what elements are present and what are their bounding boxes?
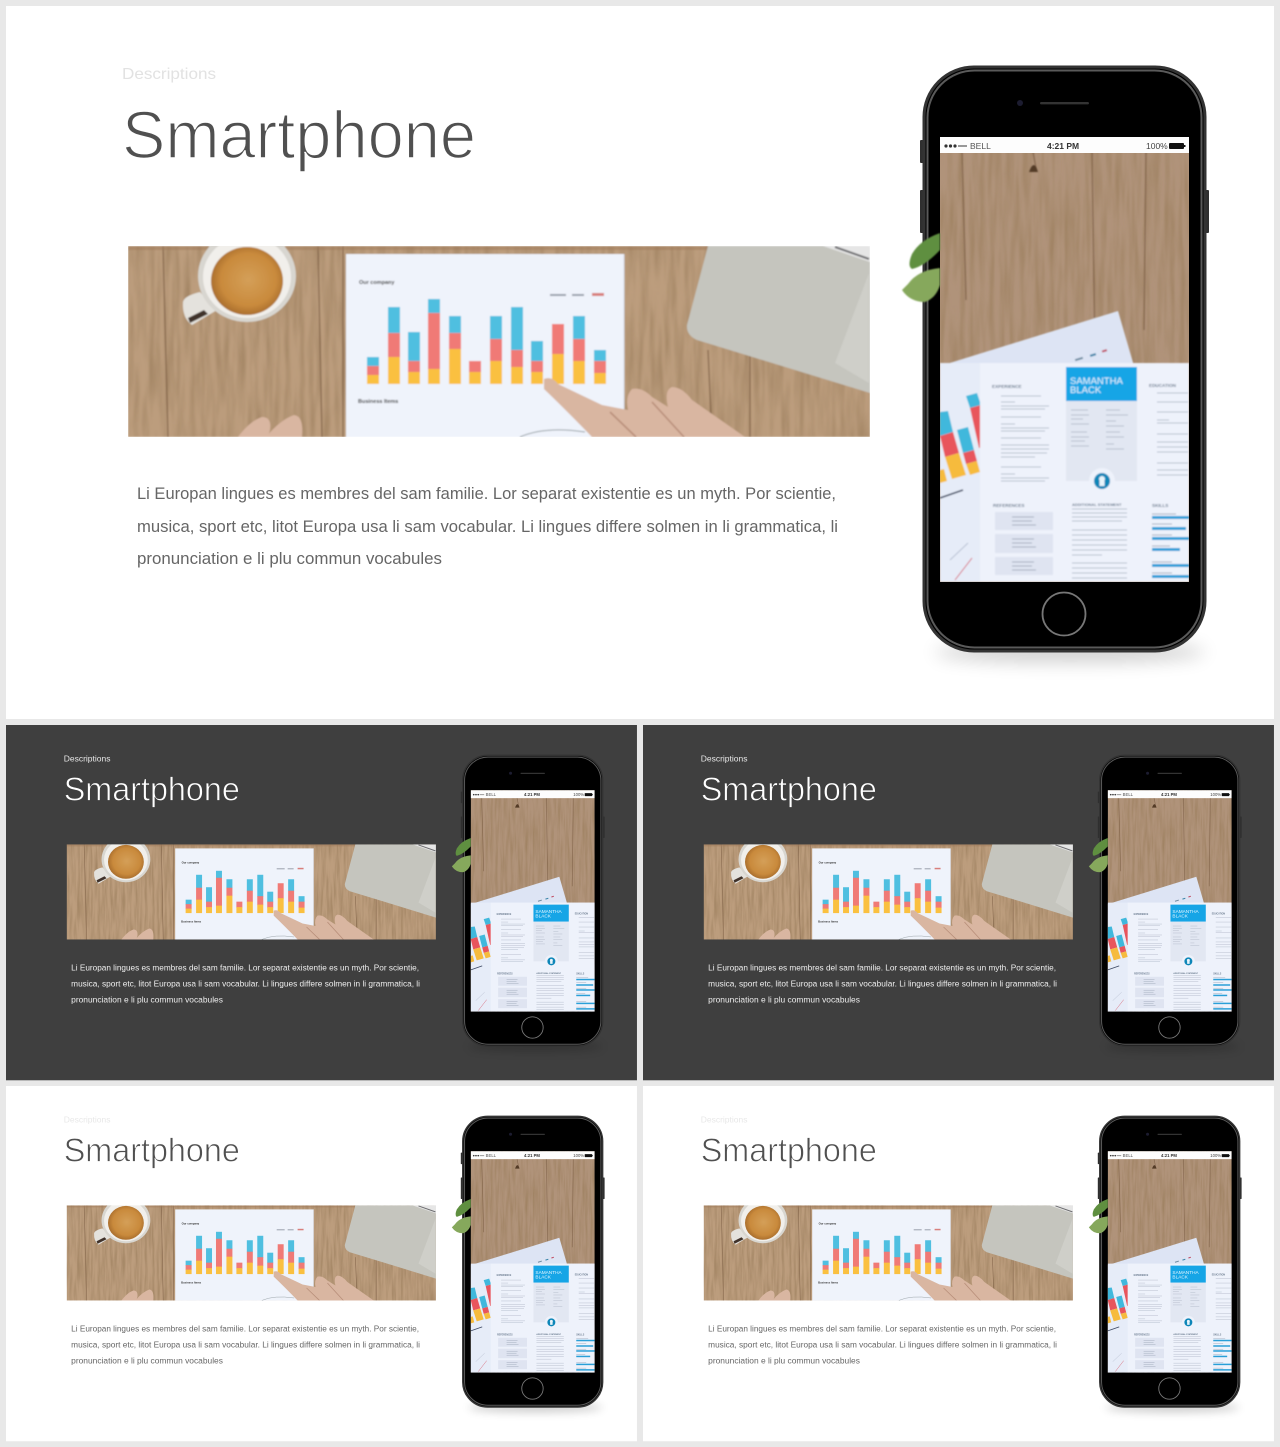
smartphone mockup [452,755,605,1051]
text block [71,962,420,1005]
panel: light slide right [643,1086,1274,1441]
panel: dark slide right [643,725,1274,1080]
panel: dark slide left [6,725,637,1080]
smartphone mockup: BELL [970,141,991,151]
eyebrow label: Descriptions [701,754,748,763]
title: Smartphone [122,98,476,173]
text block: musica, sport etc, litot Europa usa li sam vocabular. Li lingues differe solmen in li grammatica, li [71,979,420,989]
panel: light slide left [6,1086,637,1441]
text block: musica, sport etc, litot Europa usa li sam vocabular. Li lingues differe solmen in li grammatica, li [71,1340,420,1350]
text block: Li Europan lingues es membres del sam familie. Lor separat existentie es un myth. Por scientie, [71,962,419,972]
text block [708,1323,1057,1366]
smartphone mockup [902,67,1209,662]
title: Smartphone [64,1133,240,1170]
text block: musica, sport etc, litot Europa usa li sam vocabular. Li lingues differe solmen in li grammatica, li [708,1340,1057,1350]
title: Smartphone [701,1133,877,1170]
text block: pronunciation e li plu commun vocabules [71,1356,223,1366]
photo banner: desk with chart: Business Items [358,399,398,405]
title: Smartphone [64,772,240,809]
title: Smartphone [701,772,877,809]
photo banner: desk with chart [128,230,870,437]
smartphone mockup [1089,755,1242,1051]
text block: pronunciation e li plu commun vocabules [708,1356,860,1366]
photo banner [67,836,436,939]
text block: pronunciation e li plu commun vocabules [137,549,442,568]
photo banner: desk with chart: Our company [359,280,395,286]
photo banner [704,836,1073,939]
eyebrow label: Descriptions [701,1115,748,1124]
text block [71,1323,420,1366]
text block: Li Europan lingues es membres del sam familie. Lor separat existentie es un myth. Por scientie, [708,962,1056,972]
smartphone mockup: EXPERIENCE [992,384,1022,389]
text block: musica, sport etc, litot Europa usa li sam vocabular. Li lingues differe solmen in li grammatica, li [708,979,1057,989]
smartphone mockup: REFERENCES [993,503,1024,508]
smartphone mockup: 100% [1146,141,1168,151]
text block: Li Europan lingues es membres del sam familie. Lor separat existentie es un myth. Por scientie, [71,1323,419,1333]
text block: Li Europan lingues es membres del sam familie. Lor separat existentie es un myth. Por scientie, [708,1323,1056,1333]
photo banner [704,1197,1073,1300]
smartphone mockup [1089,1116,1242,1412]
text block [137,484,838,568]
smartphone mockup: BLACK [1070,385,1102,396]
eyebrow label: Descriptions [64,1115,111,1124]
smartphone mockup: SAMANTHA [1070,376,1123,387]
eyebrow label: Descriptions [64,754,111,763]
panel: main slide [6,6,1274,719]
smartphone mockup: SKILLS [1152,503,1168,508]
smartphone mockup: 4:21 PM [1047,141,1079,151]
text block: Li Europan lingues es membres del sam familie. Lor separat existentie es un myth. Por scientie, [137,484,836,503]
eyebrow label: Descriptions [122,66,216,83]
text block: musica, sport etc, litot Europa usa li sam vocabular. Li lingues differe solmen in li grammatica, li [137,517,838,536]
smartphone mockup: EDUCATION [1149,383,1177,388]
smartphone mockup [452,1116,605,1412]
photo banner [67,1197,436,1300]
text block: pronunciation e li plu commun vocabules [708,995,860,1005]
smartphone mockup: ADDITIONAL STATEMENT [1072,502,1122,507]
text block [708,962,1057,1005]
text block: pronunciation e li plu commun vocabules [71,995,223,1005]
